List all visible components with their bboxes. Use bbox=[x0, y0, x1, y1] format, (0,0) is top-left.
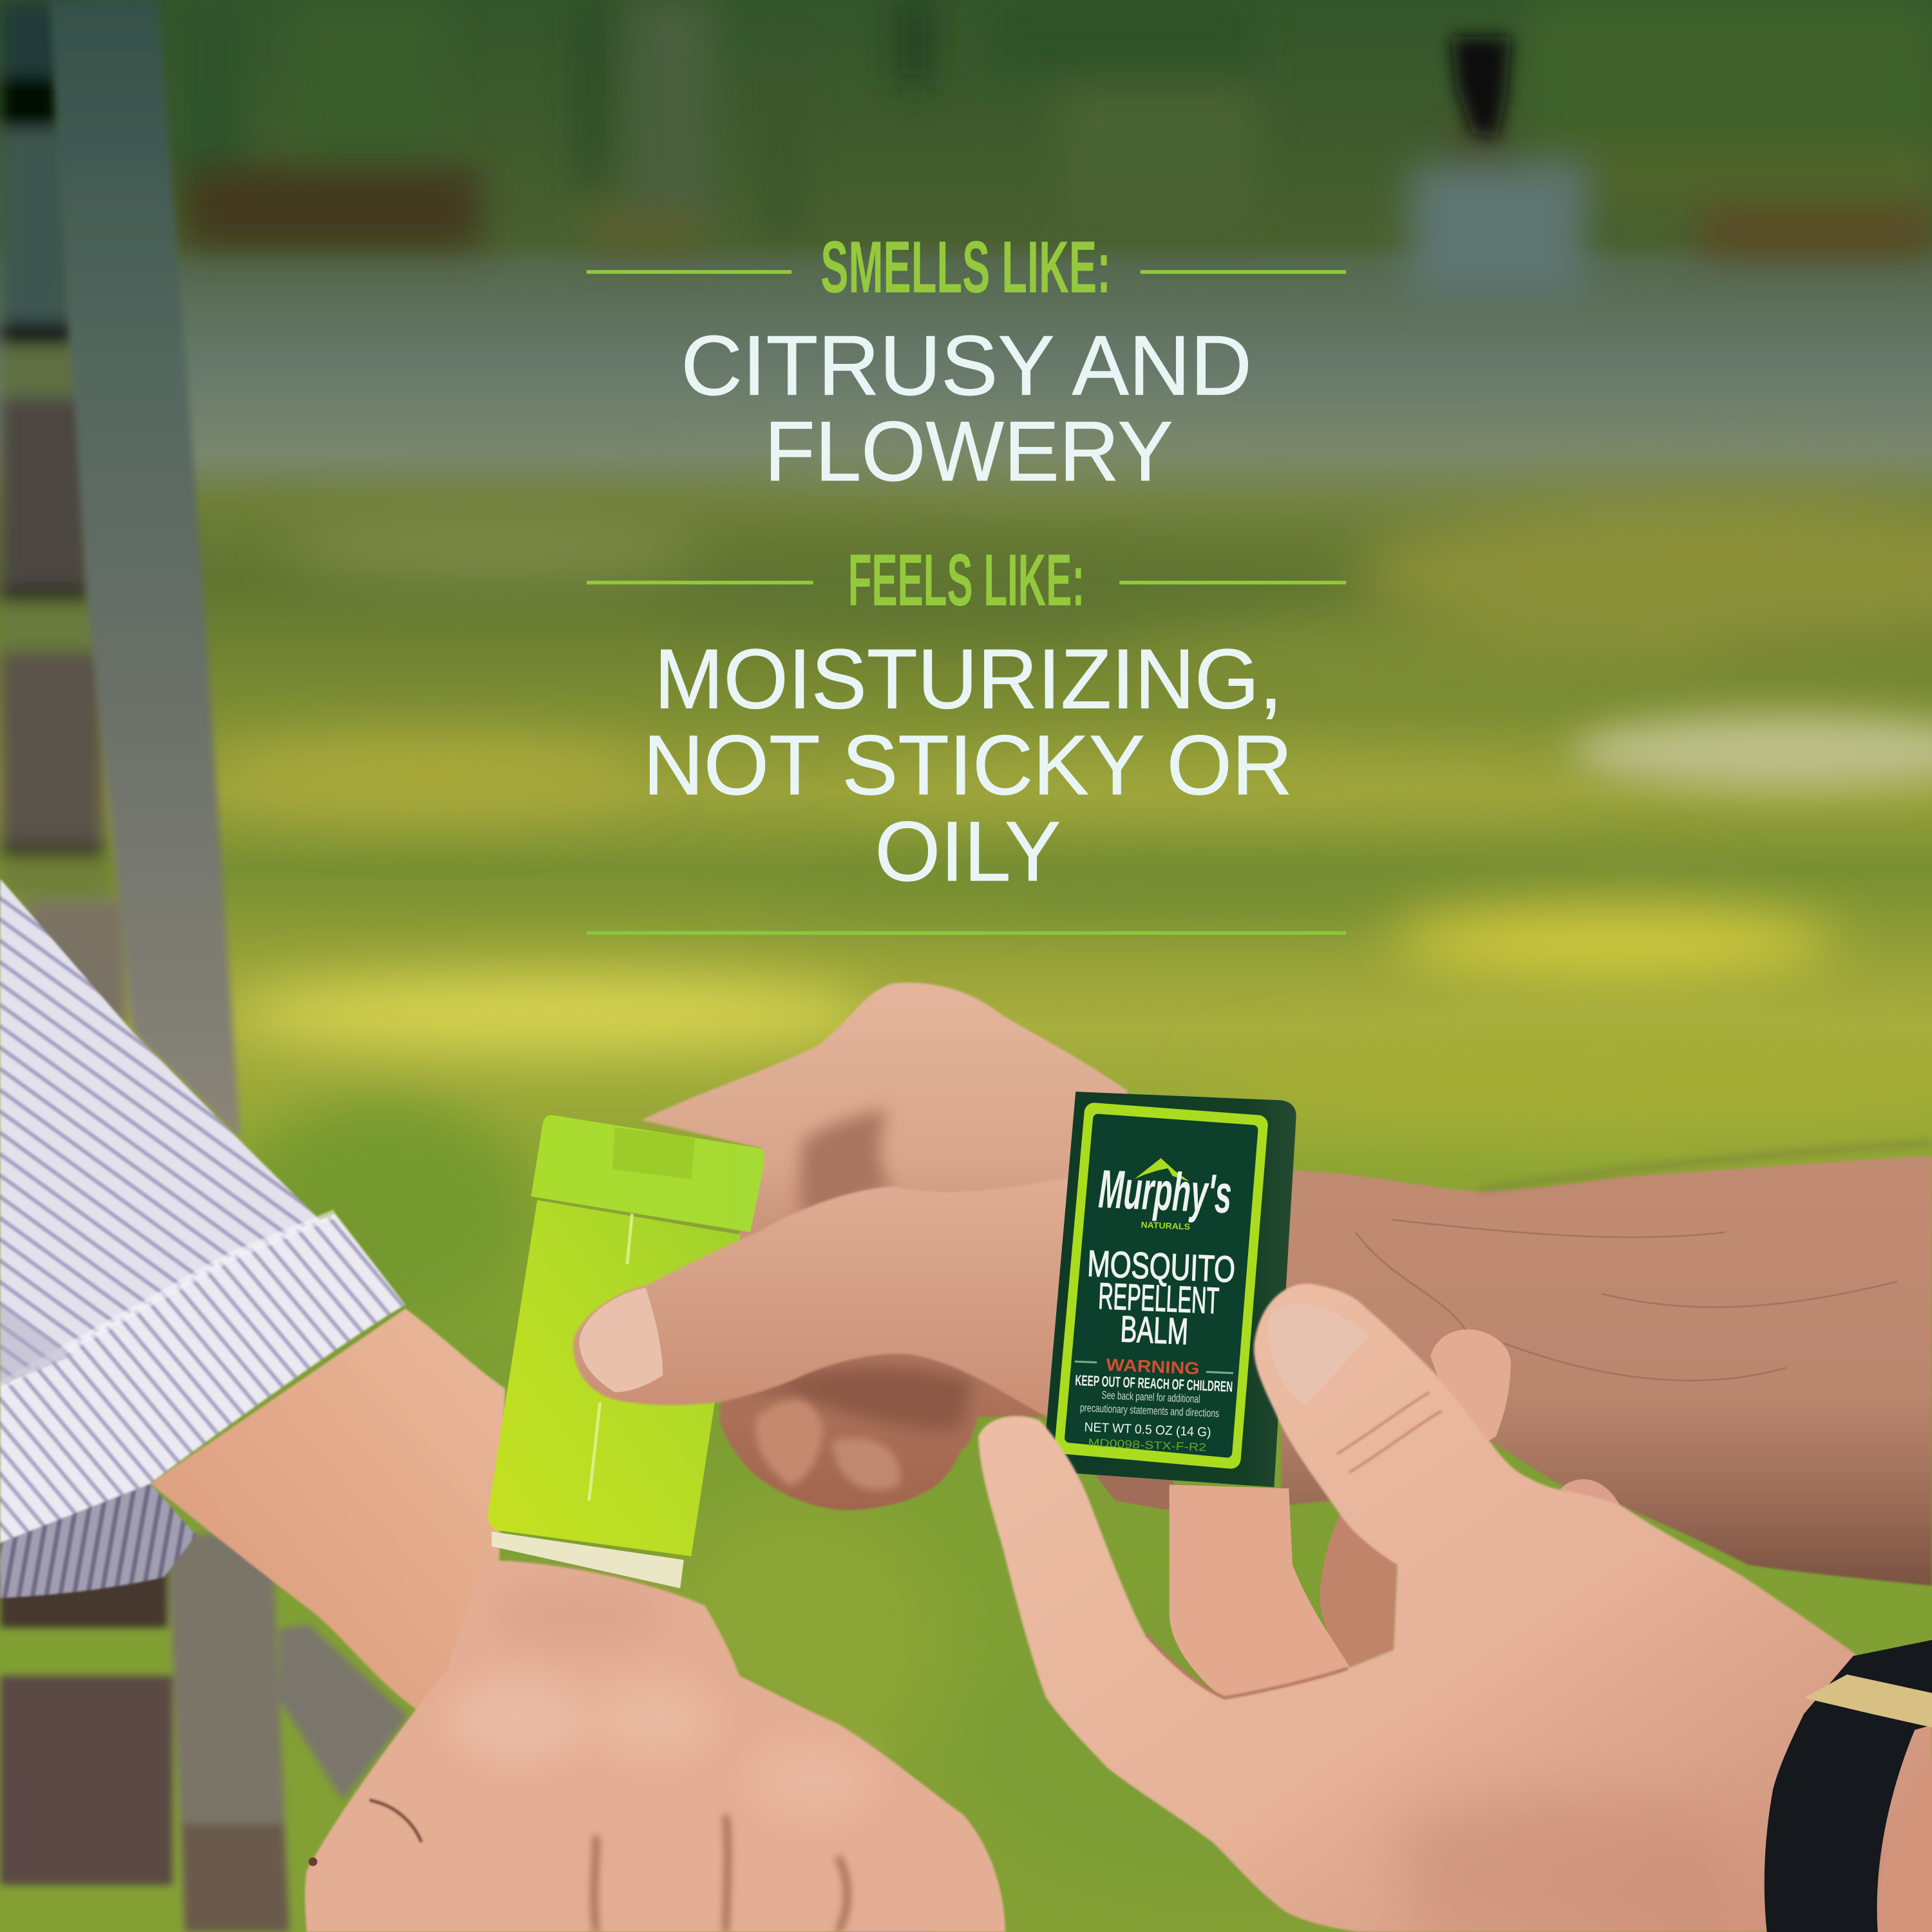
heading rule: smells like left bbox=[587, 270, 791, 274]
wristwatch bbox=[1765, 1640, 1932, 1932]
product label text: See back panel for additional bbox=[1101, 1388, 1200, 1405]
bench rail under fingers bbox=[848, 1870, 931, 1932]
right forearm bbox=[1282, 1144, 1932, 1586]
wooden bench bbox=[0, 0, 408, 1932]
product label text: NATURALS bbox=[1141, 1220, 1190, 1231]
product label text bbox=[1071, 1155, 1242, 1455]
bottom rule bbox=[587, 931, 1346, 935]
product label text: WARNING bbox=[1106, 1355, 1200, 1378]
top hand: fingers behind the stick bbox=[642, 983, 1173, 1511]
little finger tip bbox=[1560, 1479, 1622, 1508]
striped shirt sleeve bbox=[0, 878, 405, 1598]
top hand: thumb in front of the stick bbox=[573, 1171, 1109, 1417]
product label text: NET WT 0.5 OZ (14 G) bbox=[1084, 1420, 1211, 1440]
green balm stick bbox=[488, 1115, 764, 1588]
text: moisturizing, not sticky or oily: MOISTURIZING, bbox=[654, 632, 1282, 726]
text: moisturizing, not sticky or oily: NOT STICKY OR bbox=[643, 717, 1293, 812]
text: citrusy and flowery: CITRUSY AND bbox=[681, 318, 1252, 413]
product label text: MD0098-STX-F-R2 bbox=[1088, 1436, 1207, 1454]
heading: smells like: SMELLS LIKE: bbox=[820, 227, 1111, 308]
palm, index finger and thumb bbox=[978, 1283, 1932, 1932]
product label text: KEEP OUT OF REACH OF CHILDREN bbox=[1075, 1372, 1233, 1395]
heading rule: feels like right bbox=[1119, 581, 1346, 584]
heading rule: feels like left bbox=[587, 581, 813, 584]
middle finger bbox=[1170, 1484, 1350, 1701]
product label text: Murphy's bbox=[1097, 1159, 1233, 1224]
heading rule: smells like right bbox=[1141, 270, 1346, 274]
product label text: MOSQUITO bbox=[1086, 1243, 1236, 1291]
left forearm and hand bbox=[150, 1309, 1005, 1932]
text: citrusy and flowery: FLOWERY bbox=[764, 404, 1173, 498]
text: citrusy and flowery bbox=[681, 318, 1252, 498]
text: moisturizing, not sticky or oily: OILY bbox=[875, 804, 1061, 898]
ring finger bbox=[1320, 1510, 1397, 1669]
lower holding hand bbox=[978, 1283, 1932, 1932]
text: moisturizing, not sticky or oily bbox=[643, 632, 1293, 898]
product label text: precautionary statements and directions bbox=[1080, 1401, 1220, 1419]
heading: feels like: FEELS LIKE: bbox=[848, 540, 1084, 621]
finger behind thumb bbox=[1430, 1329, 1511, 1454]
product balm package bbox=[1043, 1092, 1296, 1487]
product label text: REPELLENT bbox=[1097, 1276, 1220, 1322]
product label text: BALM bbox=[1119, 1309, 1189, 1352]
